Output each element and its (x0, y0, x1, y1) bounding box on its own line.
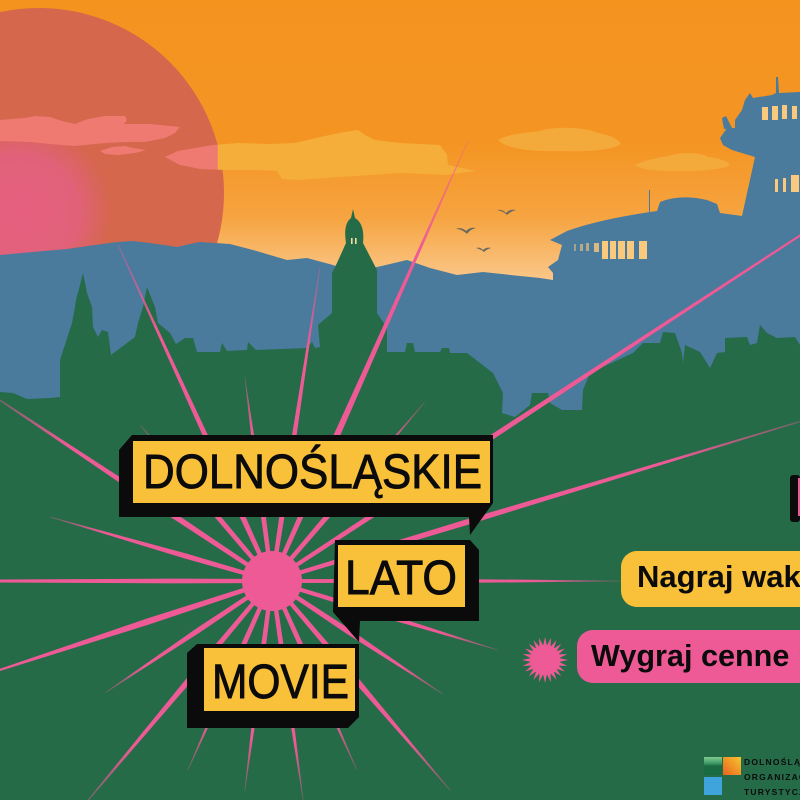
banner: dolnoslaskie (119, 435, 493, 535)
sun (0, 8, 224, 378)
clipped black label at right edge (790, 475, 800, 522)
tower windows (351, 238, 357, 244)
banner: lato (333, 540, 479, 642)
clouds (0, 116, 730, 180)
castle and tree line silhouette (0, 209, 800, 800)
banner: movie (187, 644, 359, 728)
observatory windows (574, 105, 799, 259)
mountains and observatory silhouette (0, 77, 800, 430)
banner: lato: LATO (345, 552, 457, 605)
small star icon (521, 636, 569, 684)
banner: movie: MOVIE (212, 656, 349, 709)
logo (704, 756, 800, 797)
pill: record (621, 551, 800, 607)
birds (456, 210, 516, 252)
sky background (0, 0, 800, 290)
pill: win (577, 630, 800, 683)
banner: dolnoslaskie: DOLNOŚLĄSKIE (143, 444, 482, 499)
sunburst centre (242, 551, 302, 611)
